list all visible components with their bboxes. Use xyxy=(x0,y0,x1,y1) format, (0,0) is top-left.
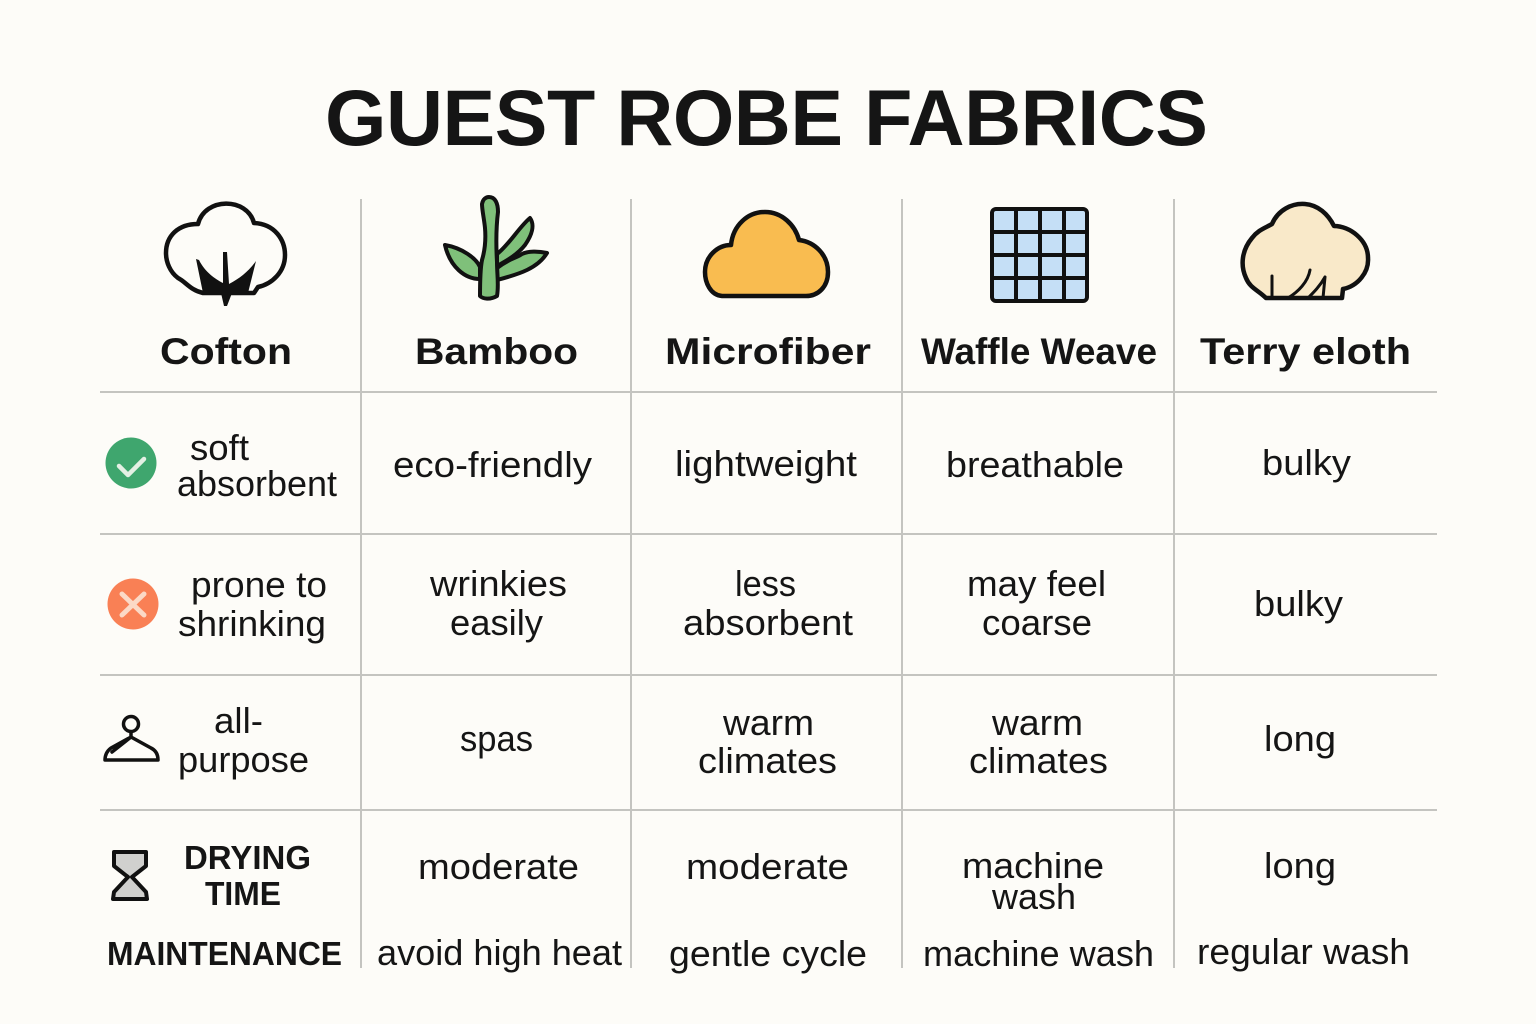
label: Microfiber: Microfiber xyxy=(665,331,871,372)
row: drying time xyxy=(113,839,1336,917)
icon: waffle grid xyxy=(992,209,1087,301)
icon: bamboo plant xyxy=(445,197,547,299)
column: cotton header xyxy=(160,204,292,372)
icon: green check xyxy=(106,438,156,488)
icon: terry cloth puff xyxy=(1243,204,1368,298)
text: soft absorbent: soft xyxy=(190,427,249,468)
text: microfiber con: less xyxy=(735,563,796,604)
text: waffle drying: machine xyxy=(962,845,1104,886)
text: waffle use xyxy=(969,702,1108,781)
label: Waffle Weave: Waffle Weave xyxy=(921,331,1157,372)
text: waffle con: coarse xyxy=(982,602,1092,643)
text: all-purpose: all- xyxy=(214,700,263,741)
text: waffle use: warm xyxy=(991,702,1083,743)
text: bamboo use: spas xyxy=(460,718,533,759)
text: terry use: long xyxy=(1264,718,1336,759)
text: prone to shrinking: prone to xyxy=(191,564,327,605)
row: maintenance xyxy=(107,931,1410,974)
text: waffle maintenance: machine wash xyxy=(923,933,1154,974)
label: Terry eloth: Terry eloth xyxy=(1200,331,1411,372)
label: drying time xyxy=(184,839,311,912)
text: waffle drying xyxy=(962,845,1104,917)
text: all-purpose: purpose xyxy=(178,739,309,780)
column: microfiber header xyxy=(665,212,871,372)
label: Bamboo: Bamboo xyxy=(415,331,578,372)
text: terry drying: long xyxy=(1264,845,1336,886)
text: microfiber con xyxy=(683,563,853,643)
text: waffle con xyxy=(967,563,1106,643)
text: microfiber maintenance: gentle cycle xyxy=(669,933,867,974)
column: bamboo header xyxy=(415,197,578,372)
row: best use xyxy=(105,700,1336,781)
text: waffle drying: wash xyxy=(991,876,1076,917)
text: bamboo con xyxy=(429,563,567,643)
column: waffle weave header xyxy=(921,209,1157,372)
row: pros xyxy=(106,427,1352,504)
row: cons xyxy=(108,563,1344,644)
icon: orange cross xyxy=(108,578,158,630)
text: bamboo maintenance: avoid high heat xyxy=(377,932,622,973)
label: Cofton: Cofton xyxy=(160,331,292,372)
label: drying time: TIME xyxy=(205,875,281,912)
icon: hanger xyxy=(105,716,158,760)
label: drying time: DRYING xyxy=(184,839,311,876)
text: prone to shrinking: shrinking xyxy=(178,603,326,644)
text: terry con: bulky xyxy=(1254,583,1344,624)
text: microfiber use: warm xyxy=(722,702,814,743)
text: bamboo con: wrinkies xyxy=(429,563,567,604)
title: GUEST ROBE FABRICS xyxy=(325,73,1208,162)
column: terry cloth header xyxy=(1200,204,1411,372)
text: prone to shrinking xyxy=(178,564,327,644)
text: microfiber con: absorbent xyxy=(683,602,853,643)
text: waffle con: may feel xyxy=(967,563,1106,604)
text: terry pro: bulky xyxy=(1262,442,1352,483)
icon: microfiber cloud xyxy=(705,212,828,296)
text: all-purpose xyxy=(178,700,309,780)
text: bamboo pro: eco-friendly xyxy=(393,444,593,485)
text: microfiber use xyxy=(698,702,837,781)
text: microfiber drying: moderate xyxy=(686,846,849,887)
text: bamboo con: easily xyxy=(450,602,544,643)
text: soft absorbent: absorbent xyxy=(177,463,337,504)
text: waffle use: climates xyxy=(969,740,1108,781)
text: bamboo drying: moderate xyxy=(418,846,579,887)
text: microfiber pro: lightweight xyxy=(675,443,857,484)
icon: cotton boll xyxy=(166,204,285,306)
text: waffle pro: breathable xyxy=(946,444,1124,485)
text: soft absorbent xyxy=(177,427,337,504)
text: terry maintenance: regular wash xyxy=(1197,931,1410,972)
text: microfiber use: climates xyxy=(698,740,837,781)
label: maintenance: MAINTENANCE xyxy=(107,935,342,972)
icon: hourglass xyxy=(113,852,147,899)
